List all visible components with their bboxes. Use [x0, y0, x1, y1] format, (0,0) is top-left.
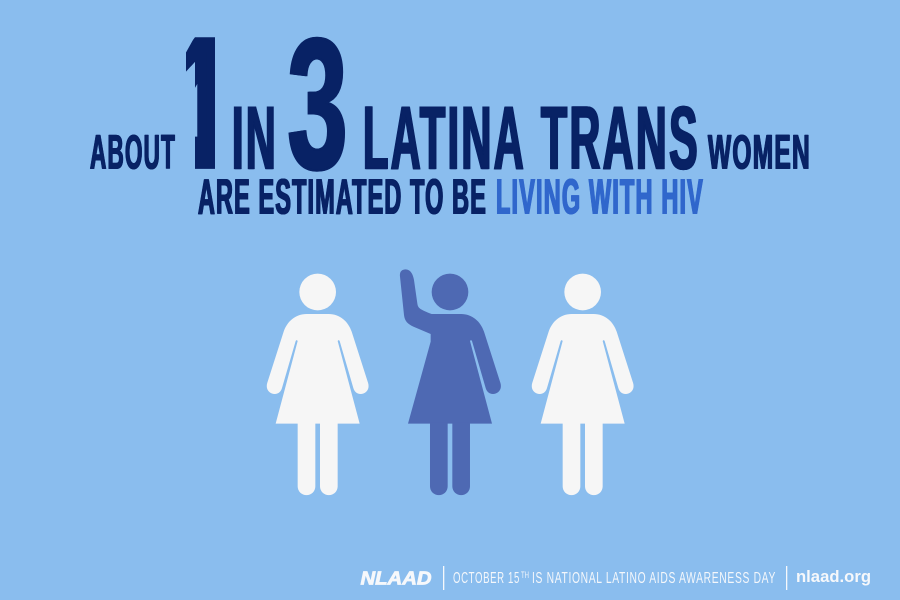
icon: white woman figure, right — [532, 274, 634, 495]
awareness day text: TH — [521, 570, 529, 580]
title: 1 in 3 Latina trans women: TRANS — [541, 87, 700, 187]
subtitle: estimated to be living with HIV: ARE ESTIMATED TO BE — [198, 170, 487, 224]
title: 1 in 3 Latina trans women: LATINA — [363, 87, 526, 187]
logo: NLAAD: NLAAD — [360, 568, 432, 588]
icon: white woman figure, left — [267, 274, 369, 495]
website: nlaad.org — [796, 567, 871, 586]
awareness day text: OCTOBER 15 — [453, 570, 520, 587]
title: 1 in 3 Latina trans women: IN — [232, 87, 278, 187]
footer — [360, 566, 871, 590]
title: 1 in 3 Latina trans women — [90, 36, 809, 172]
awareness day text: IS NATIONAL LATINO AIDS AWARENESS DAY — [532, 570, 776, 587]
title: 1 in 3 Latina trans women: 3 — [288, 0, 348, 208]
title: 1 in 3 Latina trans women: ABOUT — [90, 126, 176, 180]
awareness day text — [453, 570, 776, 587]
title: 1 in 3 Latina trans women: 1 — [186, 0, 224, 210]
icon: highlighted woman figure with raised arm, center — [400, 269, 501, 495]
